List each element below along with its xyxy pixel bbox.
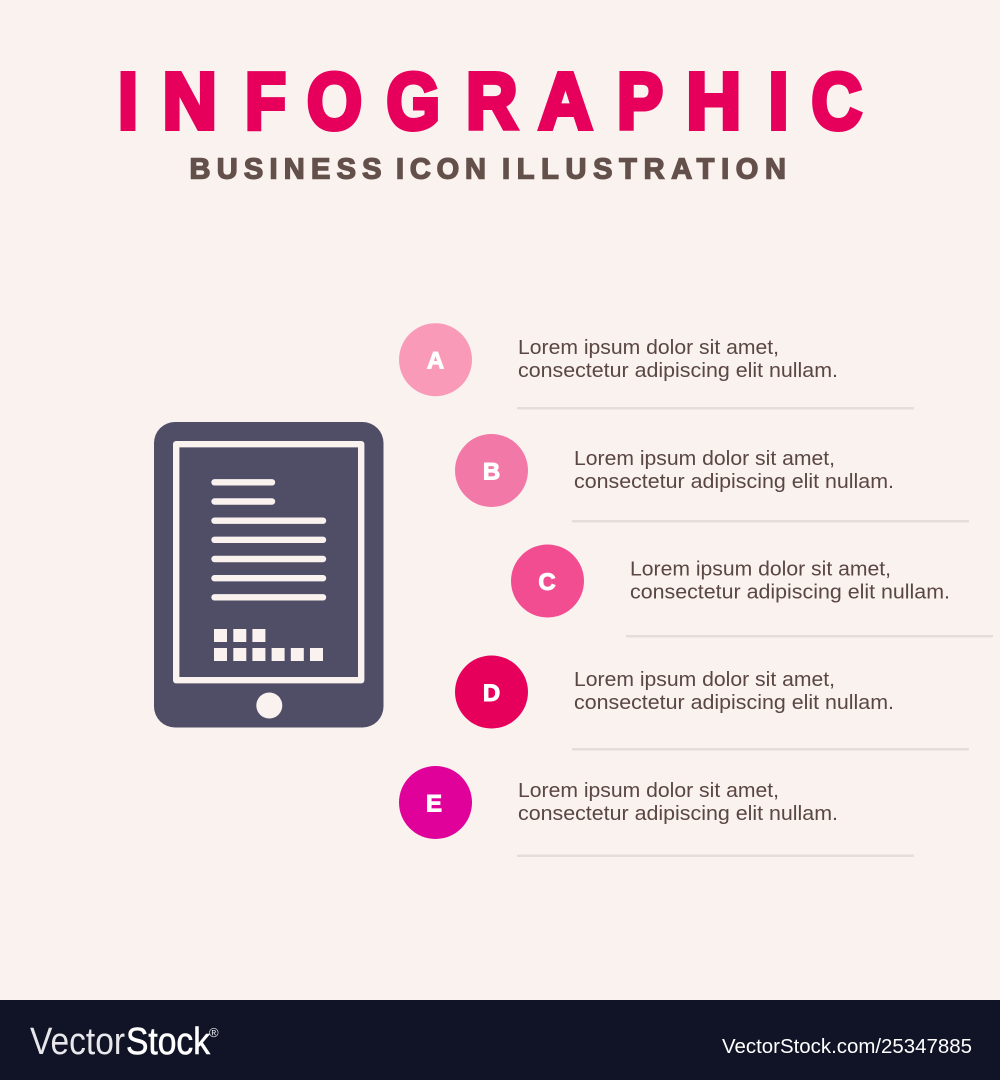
text E: consectetur adipiscing elit nullam.: [518, 802, 838, 825]
badge E: E: [426, 790, 442, 818]
title: I: [768, 56, 788, 146]
title: P: [617, 56, 663, 146]
text A: Lorem ipsum dolor sit amet,: [518, 336, 779, 359]
subtitle: [190, 154, 786, 186]
text E: Lorem ipsum dolor sit amet,: [518, 779, 779, 802]
icon: tablet with document: [154, 422, 384, 728]
footer logo: ®: [209, 1025, 219, 1040]
footer logo: Vector: [30, 1021, 125, 1063]
badge B: B: [483, 458, 500, 486]
subtitle: ICON: [396, 154, 486, 186]
footer bar: [0, 1000, 1000, 1080]
text B: consectetur adipiscing elit nullam.: [574, 470, 894, 493]
subtitle: BUSINESS: [190, 154, 382, 186]
title: F: [245, 56, 286, 146]
text C: consectetur adipiscing elit nullam.: [630, 580, 950, 604]
badge A: [399, 323, 472, 396]
footer logo: Stock: [126, 1021, 211, 1063]
item D: [455, 656, 969, 750]
footer logo: [30, 1021, 219, 1063]
title: C: [812, 56, 862, 146]
item A: [399, 323, 914, 410]
item E: [399, 766, 914, 857]
title: A: [538, 56, 592, 146]
text B: Lorem ipsum dolor sit amet,: [574, 447, 835, 470]
item B: [455, 434, 969, 522]
text E: [518, 779, 838, 825]
title: G: [386, 56, 440, 146]
title: I: [118, 56, 138, 146]
badge C: C: [538, 569, 556, 596]
text D: consectetur adipiscing elit nullam.: [574, 691, 894, 714]
badge E: [399, 766, 472, 839]
text D: Lorem ipsum dolor sit amet,: [574, 668, 835, 691]
footer url: VectorStock.com/25347885: [722, 1036, 972, 1058]
text B: [574, 447, 894, 493]
title: N: [162, 56, 217, 146]
badge D: [455, 656, 528, 728]
badge C: [511, 544, 584, 618]
item C: [511, 544, 993, 638]
text C: Lorem ipsum dolor sit amet,: [630, 558, 891, 580]
subtitle: ILLUSTRATION: [502, 154, 786, 186]
badge B: [455, 434, 528, 507]
badge D: D: [483, 680, 500, 707]
title: R: [466, 56, 518, 146]
badge A: A: [427, 348, 444, 374]
text A: consectetur adipiscing elit nullam.: [518, 359, 838, 382]
title: H: [686, 56, 741, 146]
text C: [630, 558, 950, 604]
title: O: [307, 56, 362, 146]
text D: [574, 668, 894, 714]
title: [118, 56, 862, 146]
text A: [518, 336, 838, 382]
